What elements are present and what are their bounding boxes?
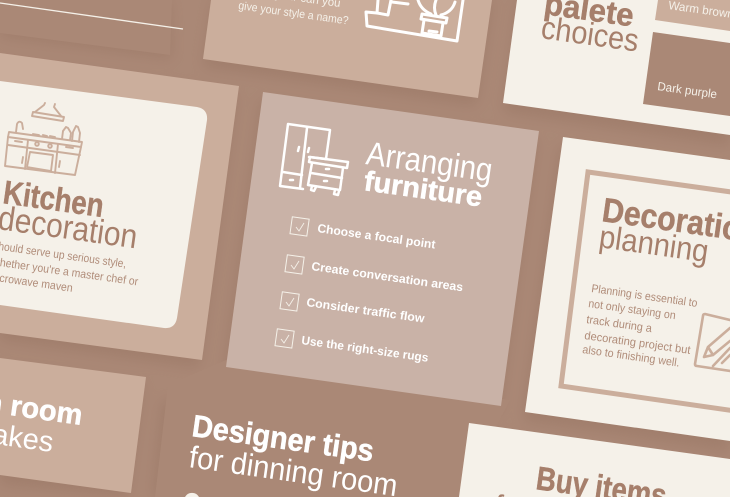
kitchen heading: [0, 173, 140, 256]
furniture heading: Arranging: [364, 134, 495, 189]
palette heading: choices: [539, 9, 641, 59]
panel: top-left card: [0, 0, 183, 55]
bullet: [185, 493, 199, 497]
checkbox row 1: Choose a focal point: [317, 221, 436, 252]
swatch: dark purple: Dark purple: [657, 79, 718, 101]
checkbox row 3: Consider traffic flow: [306, 295, 426, 326]
decoration body text: not only staying on: [588, 298, 676, 322]
panel: buy items card: [459, 423, 730, 497]
panel: colour palette card: [503, 0, 730, 135]
kitchen body text: [0, 240, 139, 295]
kitchen heading: decoration: [0, 199, 140, 256]
panel: style name card: [203, 0, 492, 98]
frame: [561, 172, 730, 411]
decoration body text: Planning is essential to: [591, 283, 698, 310]
decoration body text: also to finishing well.: [582, 344, 680, 370]
icon: wardrobe and nightstand: [280, 124, 348, 195]
icon: pencil and ruler: [695, 314, 730, 371]
panel: designer tips card: [155, 360, 510, 497]
buy items heading: [492, 459, 669, 497]
swatch: dark purple: [643, 32, 730, 116]
style name text: give your style a name?: [238, 0, 349, 27]
panel: arranging furniture card: [226, 92, 539, 406]
designer tips heading: Designer tips: [190, 408, 376, 468]
kitchen heading: Kitchen: [1, 173, 106, 224]
furniture heading: [362, 134, 495, 213]
kitchen inner white card: [0, 81, 207, 328]
panel: kitchen card: [0, 53, 239, 360]
decoration body text: decorating project but: [584, 330, 692, 357]
decoration body text: [582, 283, 698, 370]
mistakes heading: [0, 387, 84, 459]
checkbox row 2: Create conversation areas: [311, 259, 464, 294]
icon: kitchen: [5, 103, 82, 175]
checkbox row 4: Use the right-size rugs: [301, 333, 430, 365]
decoration heading: planning: [597, 218, 711, 269]
furniture heading: furniture: [362, 165, 484, 213]
designer tips heading: [187, 408, 400, 497]
panel: decoration planning card: [525, 137, 730, 441]
decoration body text: track during a: [586, 314, 653, 335]
icon: stairs and plant: [366, 0, 463, 41]
panel: dining room mistakes card: [0, 358, 146, 493]
checklist: [275, 217, 464, 365]
swatch: warm brown: [655, 0, 730, 31]
